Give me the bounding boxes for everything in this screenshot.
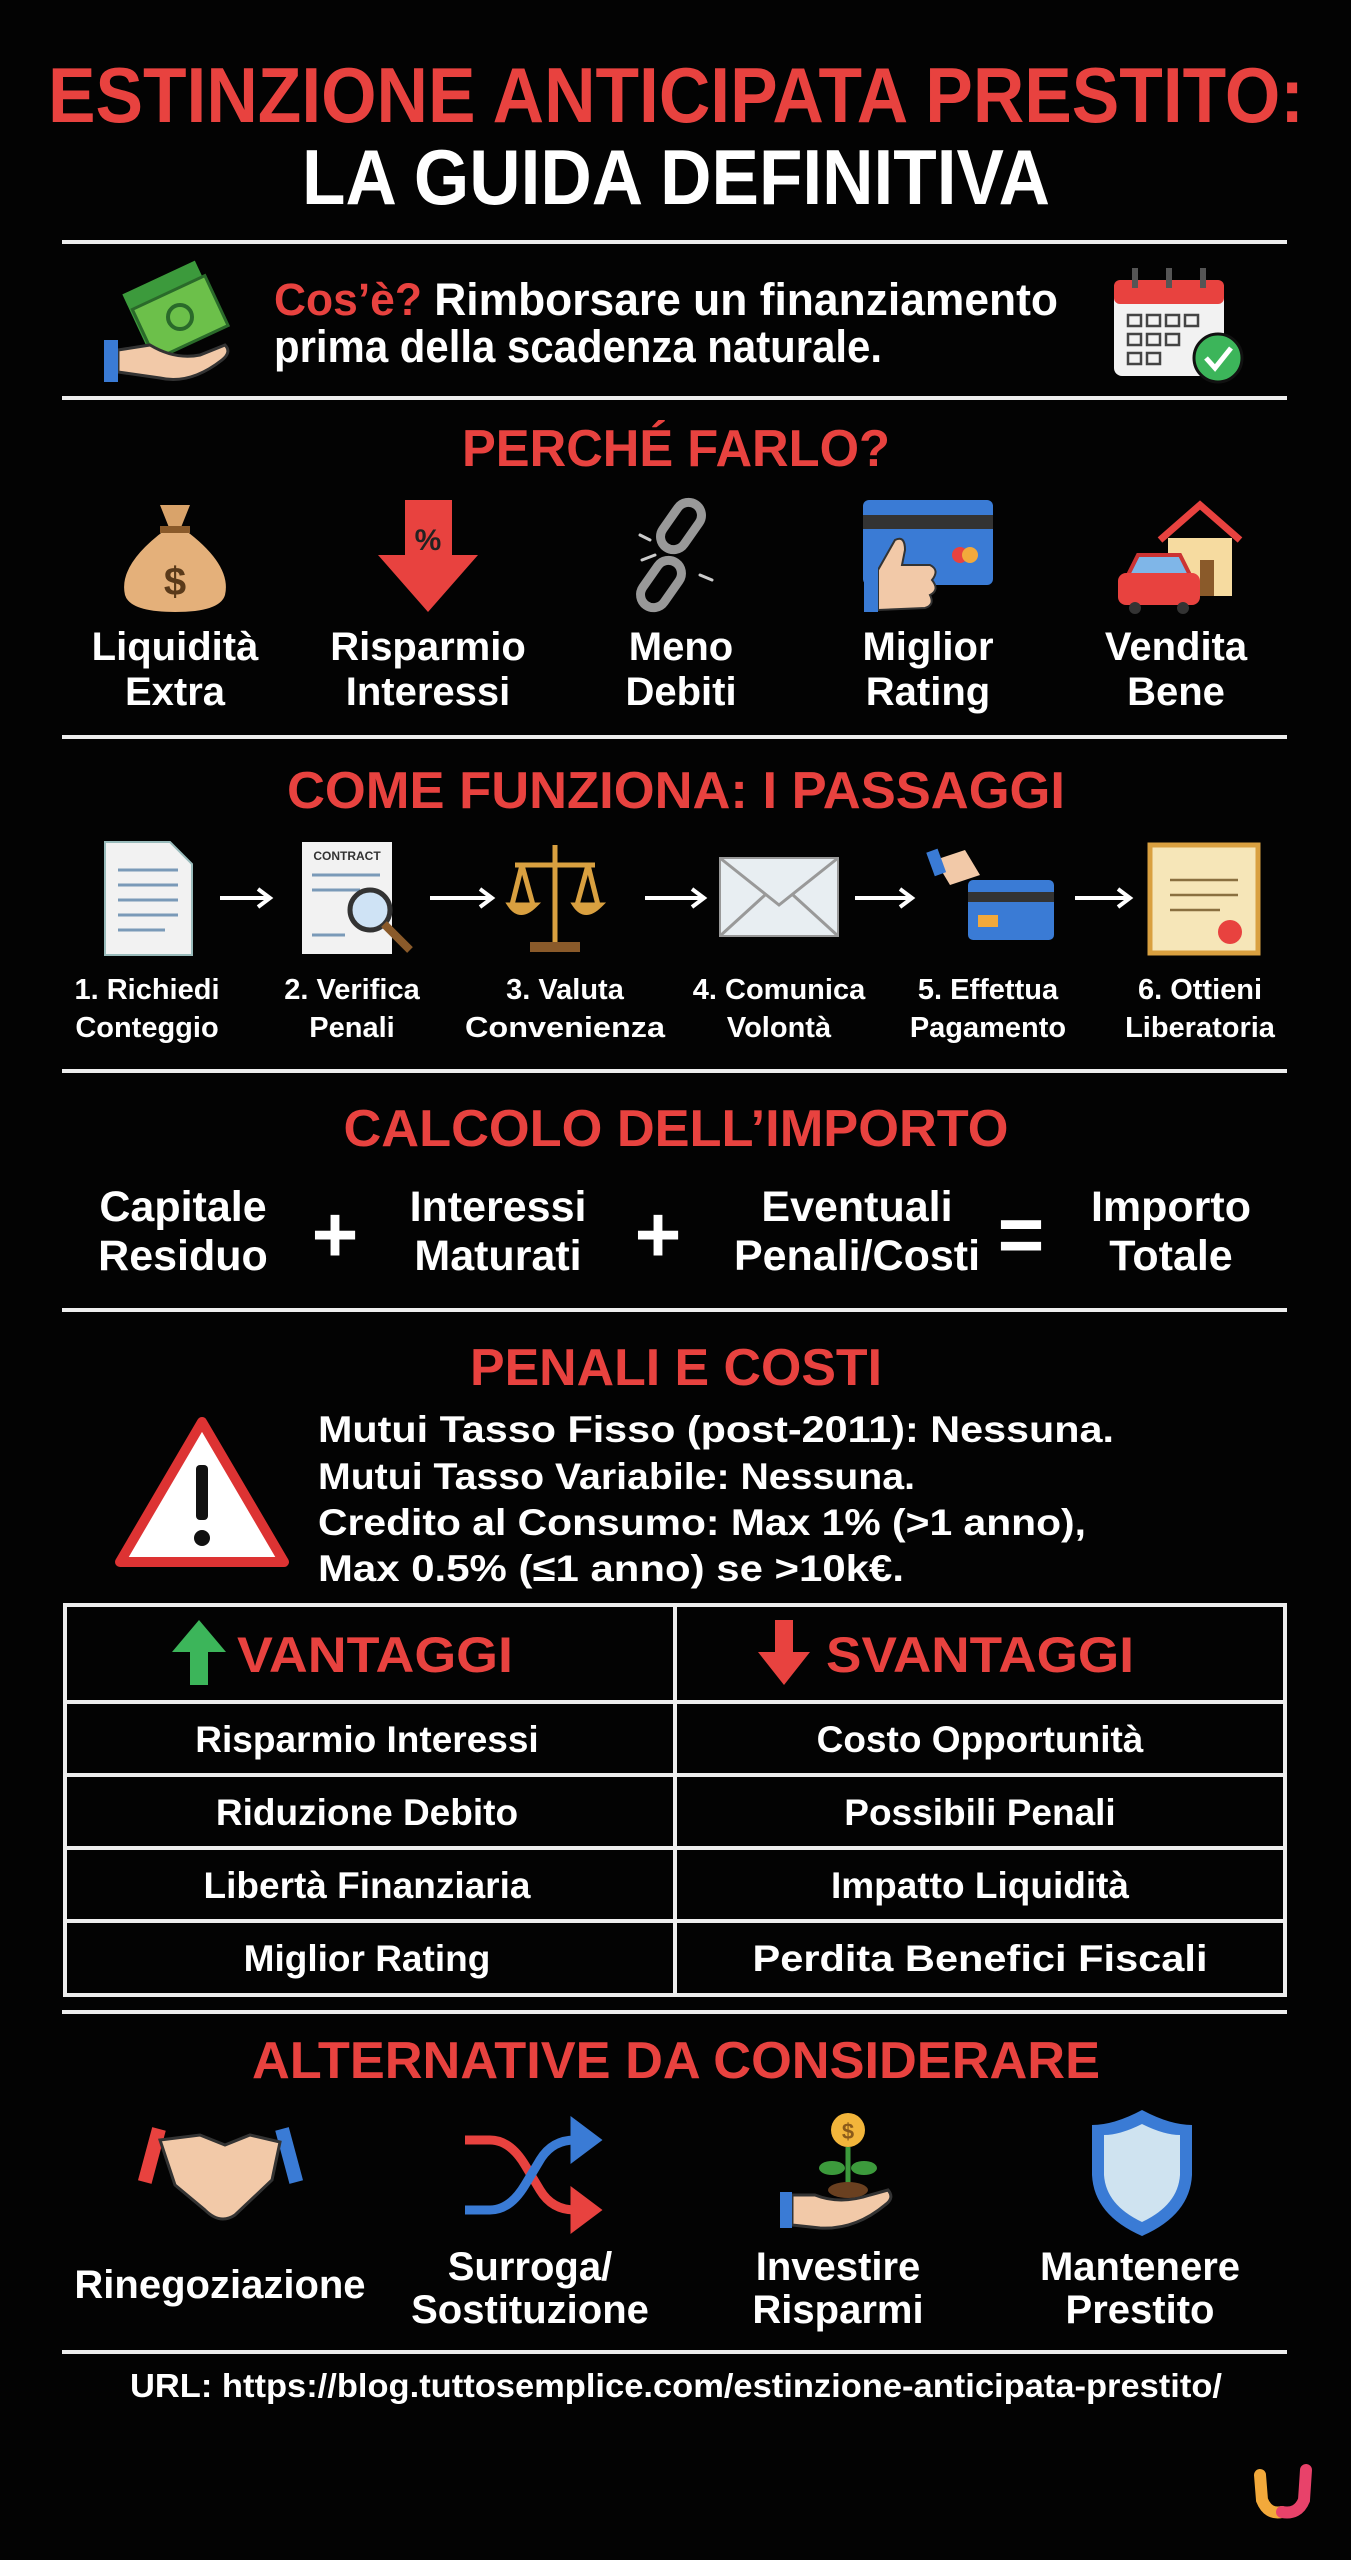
icon: card payment <box>926 849 1054 940</box>
icon: handshake <box>138 2127 303 2219</box>
labels: perché farlo: Risparmio <box>330 625 526 669</box>
text block: definition: prima della scadenza naturale. <box>274 321 882 372</box>
formula: Residuo <box>98 1232 268 1280</box>
heading: perché farlo: PERCHÉ FARLO? <box>462 420 890 478</box>
icon: shuffle arrows <box>465 2125 595 2225</box>
formula: Maturati <box>414 1232 582 1280</box>
formula: Importo <box>1091 1183 1251 1231</box>
text block: penalties: Max 0.5% (≤1 anno) se >10k€. <box>318 1548 904 1589</box>
labels: steps: Conteggio <box>75 1012 219 1044</box>
text block: penalties: Mutui Tasso Fisso (post-2011): Nessuna. <box>318 1409 1114 1450</box>
labels: perché farlo: Rating <box>866 670 990 714</box>
icon: calendar check <box>1114 268 1242 382</box>
icon: money bag: $ <box>164 560 186 604</box>
labels: perché farlo: Bene <box>1127 670 1225 714</box>
labels: perché farlo: Extra <box>125 670 226 714</box>
text block: penalties: Credito al Consumo: Max 1% (>1 anno), <box>318 1502 1086 1543</box>
arrows: steps <box>220 889 1130 907</box>
labels: perché farlo: Interessi <box>346 670 510 714</box>
table: vantaggi / svantaggi: Costo Opportunità <box>817 1719 1144 1760</box>
heading: come funziona: COME FUNZIONA: I PASSAGGI <box>287 762 1065 820</box>
icon: plant coin hand: $ <box>842 2119 854 2144</box>
icon: red down arrow <box>758 1620 810 1685</box>
table: vantaggi / svantaggi: SVANTAGGI <box>826 1627 1134 1683</box>
labels: steps: Liberatoria <box>1125 1012 1276 1044</box>
formula: Totale <box>1109 1232 1233 1280</box>
table: vantaggi / svantaggi: Libertà Finanziaria <box>204 1865 531 1906</box>
labels: steps: 4. Comunica <box>693 974 866 1006</box>
table: vantaggi / svantaggi: Miglior Rating <box>244 1938 490 1979</box>
footer url: URL: https://blog.tuttosemplice.com/estinzione-anticipata-prestito/ <box>130 2367 1222 2404</box>
heading: alternative: ALTERNATIVE DA CONSIDERARE <box>252 2032 1100 2090</box>
formula: Interessi <box>410 1183 586 1231</box>
icon: house and car <box>1118 505 1240 614</box>
labels: perché farlo: Debiti <box>625 670 737 714</box>
formula: Capitale <box>99 1183 267 1231</box>
icon: down arrow percent <box>378 500 478 612</box>
formula: + <box>312 1190 358 1279</box>
icon: scales <box>510 845 600 952</box>
icon: green up arrow <box>172 1620 226 1685</box>
labels: alternative: Mantenere <box>1040 2245 1240 2289</box>
icon: contract magnifier <box>302 842 410 954</box>
labels: steps: 5. Effettua <box>918 974 1059 1006</box>
labels: alternative: Sostituzione <box>411 2288 649 2332</box>
labels: perché farlo: Miglior <box>862 625 994 669</box>
icon: money in hand <box>104 261 228 382</box>
icon: logo <box>1260 2470 1306 2512</box>
labels: alternative: Surroga/ <box>448 2245 612 2289</box>
icon: money bag <box>124 505 226 612</box>
icon: broken chain <box>635 497 712 613</box>
labels: alternative: Rinegoziazione <box>74 2263 366 2307</box>
labels: perché farlo <box>92 625 1248 714</box>
table: vantaggi / svantaggi: Possibili Penali <box>844 1792 1116 1833</box>
labels: steps: Pagamento <box>910 1012 1066 1044</box>
icon: envelope <box>720 858 838 936</box>
table: vantaggi / svantaggi: Perdita Benefici Fiscali <box>752 1938 1208 1979</box>
labels: steps: 2. Verifica <box>284 974 421 1006</box>
labels: perché farlo: Meno <box>629 625 733 669</box>
labels: steps: 1. Richiedi <box>74 974 220 1006</box>
formula <box>98 1183 1251 1280</box>
title <box>48 51 1304 221</box>
labels: steps <box>74 974 1276 1044</box>
formula: + <box>635 1190 681 1279</box>
icon: warning <box>120 1422 284 1562</box>
formula: Eventuali <box>761 1183 953 1231</box>
heading: penali e costi: PENALI E COSTI <box>470 1339 882 1397</box>
table: vantaggi / svantaggi: Impatto Liquidità <box>831 1865 1129 1906</box>
labels: alternative: Investire <box>756 2245 920 2289</box>
labels: steps: Convenienza <box>465 1012 666 1044</box>
text block: penalties: Mutui Tasso Variabile: Nessuna. <box>318 1456 915 1497</box>
icon: down arrow percent: % <box>415 524 441 557</box>
formula: Penali/Costi <box>734 1232 980 1280</box>
table: vantaggi / svantaggi: Risparmio Interessi <box>195 1719 539 1760</box>
icon: document <box>105 842 192 955</box>
icon: plant coin hand <box>780 2113 891 2228</box>
title: LA GUIDA DEFINITIVA <box>302 133 1050 221</box>
formula: = <box>998 1190 1044 1279</box>
labels: alternative: Risparmi <box>752 2288 924 2332</box>
labels: perché farlo: Liquidità <box>92 625 259 669</box>
labels: alternative: Prestito <box>1066 2288 1214 2332</box>
labels: steps: 3. Valuta <box>506 974 625 1006</box>
labels: steps: Penali <box>309 1012 395 1044</box>
icon: certificate <box>1150 845 1258 953</box>
labels: steps: Volontà <box>727 1012 832 1044</box>
icon: contract magnifier: CONTRACT <box>313 849 381 863</box>
table: vantaggi / svantaggi: Riduzione Debito <box>216 1792 518 1833</box>
text block: penalties <box>318 1409 1114 1589</box>
labels: alternative <box>74 2245 1240 2332</box>
table: vantaggi / svantaggi: VANTAGGI <box>237 1627 513 1683</box>
text block: definition: Cos’è? Rimborsare un finanziamento <box>274 274 1058 325</box>
table: vantaggi / svantaggi <box>65 1605 1285 1995</box>
text block: definition <box>274 274 1058 372</box>
steps icons <box>105 842 1258 955</box>
labels: perché farlo: Vendita <box>1105 625 1248 669</box>
labels: steps: 6. Ottieni <box>1138 974 1262 1006</box>
icon: shield <box>1092 2110 1192 2236</box>
icon: card thumbs up <box>863 500 993 612</box>
heading: calcolo: CALCOLO DELL’IMPORTO <box>344 1100 1008 1158</box>
